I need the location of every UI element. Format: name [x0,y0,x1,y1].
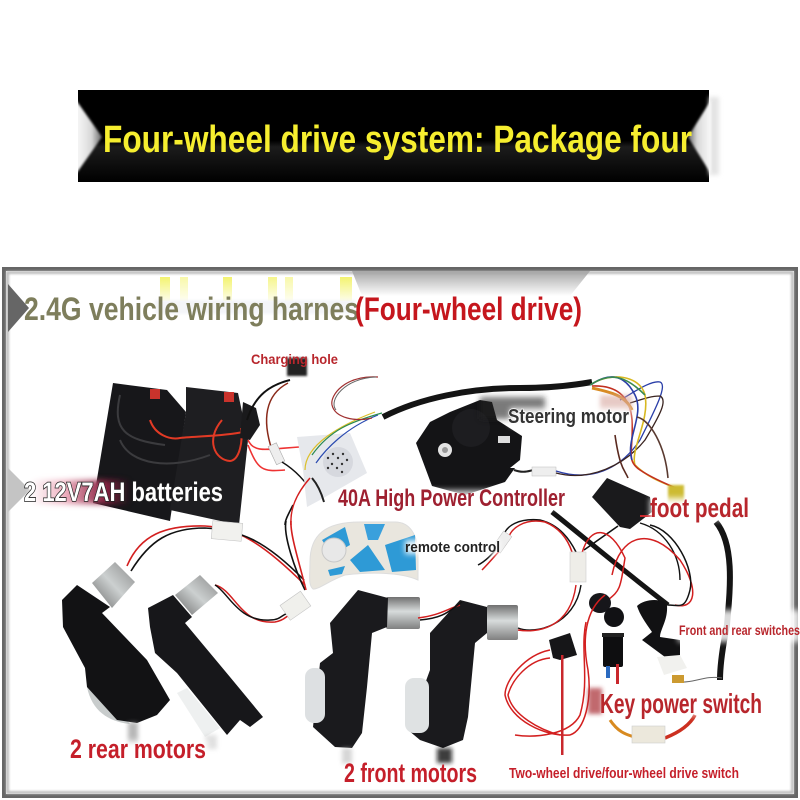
label: remote control: remote control [405,539,500,556]
batteries [93,383,260,525]
title text: Four-wheel drive system: Package four [103,119,692,161]
front motor right [405,553,581,764]
label: batteries: 2 12V7AH batteries [24,477,223,507]
power connector loop [610,715,695,743]
label: charging hole: Charging hole [251,351,338,367]
foot pedal [584,478,684,580]
charging hole wires and plug [247,358,318,500]
blurred label backdrops [30,408,800,784]
rocker switch two-wheel drive [505,633,577,755]
front and rear switch [637,600,722,683]
front motor left [305,590,420,764]
steering motor [416,382,663,495]
front wiring, connector and thick cable [402,512,730,680]
label: controller: 40A High Power Controller [338,485,565,512]
key switch [515,582,624,736]
label: rear motors: 2 rear motors [70,734,206,764]
heading: four-wheel drive: (Four-wheel drive) [355,291,582,327]
remote control [310,522,418,589]
label: foot pedal: foot pedal [650,493,749,523]
controller board [297,377,382,507]
wire bundle to foot pedal [590,377,680,490]
rear motor left [62,562,170,744]
label: front motors: 2 front motors [344,758,477,788]
rear motor right [148,575,263,749]
rear motor wiring [127,478,311,622]
label: steering motor: Steering motor [508,406,629,428]
heading: 2.4G vehicle wiring harness: 2.4G vehicle wiring harnes [24,291,359,327]
label: two-wheel drive / four-wheel drive switch: Two-wheel drive/four-wheel drive switch [509,766,739,782]
title banner [74,84,719,188]
main harness cable [383,382,592,417]
panel: wiring harness frame [4,269,796,796]
